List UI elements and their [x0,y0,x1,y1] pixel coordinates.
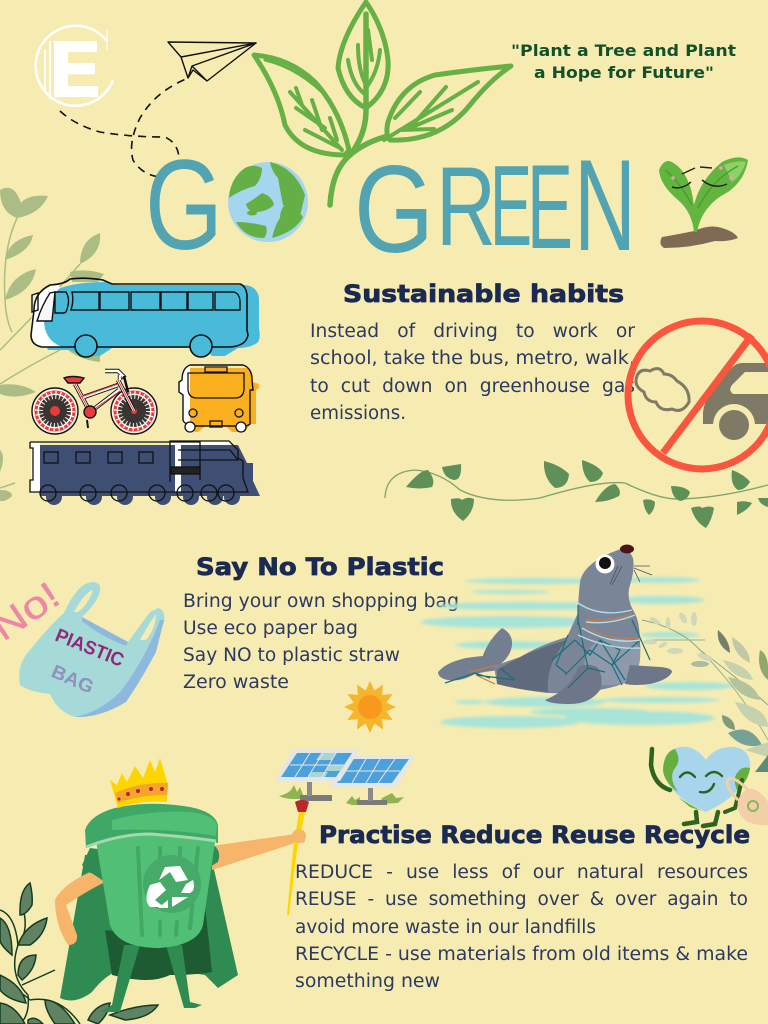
title: GO GREEN [145,132,636,279]
word: GREEN: E [527,140,573,274]
text block: plastic tips: Use eco paper bag [183,618,358,639]
fishing net [445,605,650,688]
tail flippers [438,656,500,680]
icon: happy seedling [659,157,748,248]
word: GREEN: N [574,132,636,278]
word: GREEN: E [490,143,532,270]
crown [110,758,168,808]
heading: Say No To Plastic: Say No To Plastic [196,553,444,581]
title: GO GREEN: G [145,134,223,277]
text block: 3R definitions: REUSE - use something over & over again to [295,889,748,910]
icon: no car sign [628,321,768,469]
right arm [212,834,305,870]
icon: vine [385,460,768,528]
heading: Practise Reduce Reuse Recycle: Practise Reduce Reuse Recycle [319,821,750,849]
text block: plastic tips: Bring your own shopping bag [183,591,459,612]
icon: plastic bag with No [0,574,164,717]
quote: a Hope for Future" [534,63,714,82]
icon: sun [344,681,396,733]
icon: navy train [30,441,260,505]
quote: "Plant a Tree and Plant [511,41,736,60]
text block: habits paragraph: Instead of driving to work or [310,321,635,342]
logo: white E emblem [36,26,113,114]
icon: red bicycle [32,371,157,434]
illustration: hand-drawn green leaves [254,2,511,205]
icon: dashed flight path [60,79,186,177]
scepter [287,800,309,915]
front flipper [545,665,602,704]
section: Say No To Plastic [183,553,459,693]
icon: paper plane [168,42,256,81]
word: GREEN [354,132,636,279]
icon: blue bus [31,278,260,357]
left arm [55,872,105,945]
text block: plastic tips: Zero waste [183,672,289,693]
seal body [494,547,640,693]
text block: plastic tips: Say NO to plastic straw [183,645,400,666]
text block: 3R definitions: something new [295,971,440,992]
icon: solar panels [275,749,416,805]
text block: habits paragraph: school, take the bus, metro, walk, [310,348,635,369]
heading: Sustainable habits: Sustainable habits [343,280,624,308]
section: Practise Reduce Reuse Recycle [295,821,750,992]
text block: habits paragraph: to cut down on greenhouse gas [310,376,635,397]
word: GREEN: R [436,144,496,269]
icon: right eucalyptus foliage [642,611,768,772]
text block: habits paragraph [310,321,635,424]
legs [100,945,202,1012]
text block: 3R definitions: RECYCLE - use materials from old items & make [295,944,748,965]
icon: recycling bin king [55,758,309,1012]
bin body [95,835,216,948]
cape [60,855,238,1000]
section: Sustainable habits [310,280,635,424]
text block: plastic tips [183,591,459,693]
lid [85,804,218,848]
icon: plastic bag with No: BAG [48,661,97,698]
background foliage: left olive branches [0,188,104,501]
text block: habits paragraph: emissions. [310,403,406,424]
icon: fern bottom left [0,883,158,1024]
icon: earth globe as the letter O [228,154,308,243]
text block: 3R definitions [295,862,748,992]
text block: 3R definitions: REDUCE - use less of our natural resources [295,862,748,883]
water [420,577,735,728]
recycle emblem [143,855,201,913]
word: GREEN: G [354,141,434,279]
text block: 3R definitions: avoid more waste in our landfills [295,917,596,938]
icon: orange bus front view [179,365,259,432]
quote [511,41,736,82]
icon: plastic bag with No: PIASTIC [52,625,127,672]
logo: white E emblem: E [54,26,98,114]
icon: seal tangled in net [420,544,735,728]
icon: smiling earth heart [651,747,768,826]
